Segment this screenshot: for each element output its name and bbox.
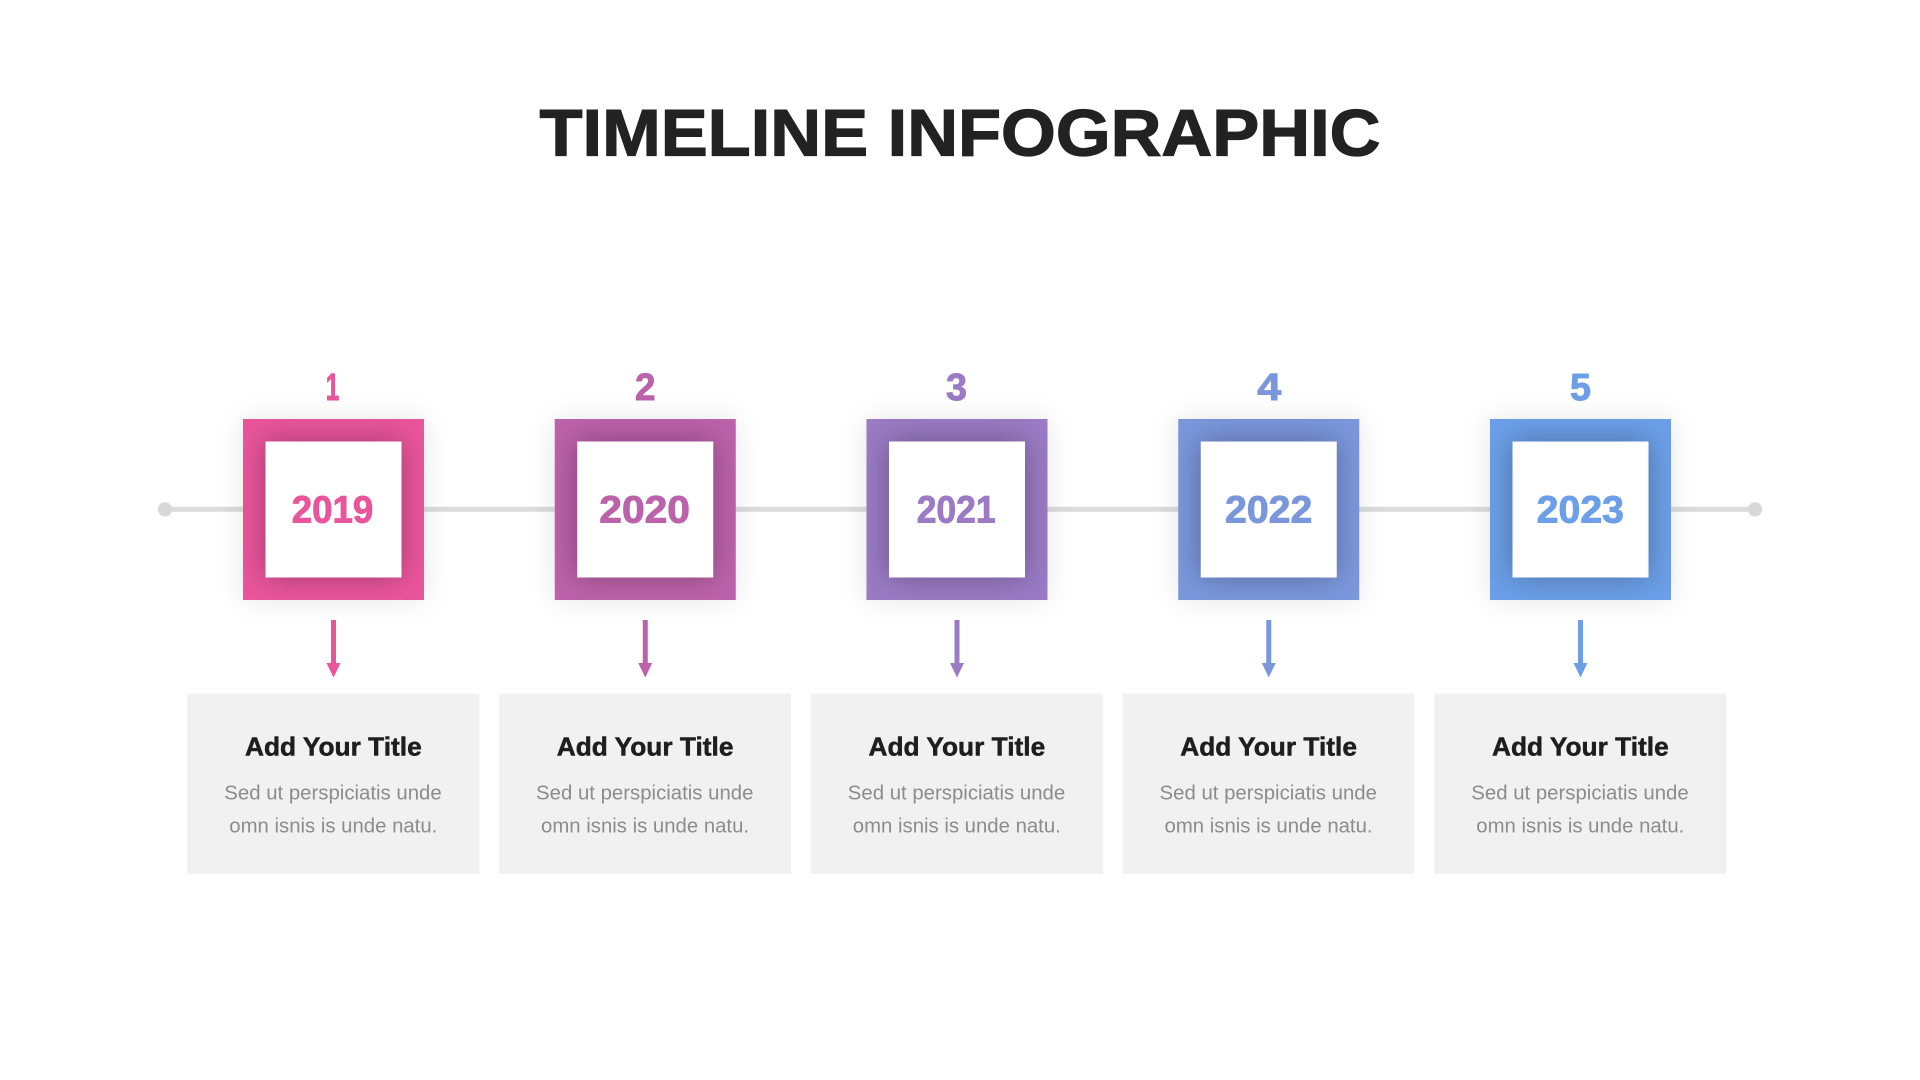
arrow 4 [1262,620,1276,678]
step 2: 2020 [499,367,791,874]
timeline end dot [1748,502,1762,516]
arrow 2 [638,620,652,678]
year box 2019 [243,419,424,600]
year box 2023 [1490,419,1671,600]
card 4: Add Your Title [1180,731,1357,761]
year box 2020: 2020 [599,490,690,532]
step 5: 2023 [1434,367,1726,874]
step 1: 2019 [187,367,479,874]
timeline start dot [158,502,172,516]
step number 2: 2 [635,367,656,409]
step number 1: 1 [326,367,339,409]
card 4: omn isnis is unde natu. [1165,816,1373,838]
step number 5: 5 [1570,367,1591,409]
card 1 [187,694,479,874]
card 5: omn isnis is unde natu. [1476,816,1684,838]
step number 4: 4 [1257,367,1281,409]
arrow 5 [1574,620,1588,678]
card 3: Sed ut perspiciatis unde [848,782,1065,804]
card 3 [811,694,1103,874]
arrow 1 [326,620,340,678]
card 5: Add Your Title [1492,731,1669,761]
card 5: Sed ut perspiciatis unde [1471,782,1689,804]
card 3: omn isnis is unde natu. [853,816,1061,838]
card 2: Add Your Title [557,731,733,761]
year box 2022: 2022 [1225,490,1312,532]
card 2: omn isnis is unde natu. [541,816,749,838]
timeline axis line [158,502,1762,516]
card 2 [499,694,791,874]
card 1: omn isnis is unde natu. [229,816,437,838]
card 5 [1434,694,1726,874]
step 4: 2022 [1123,367,1415,874]
year box 2023: 2023 [1537,490,1624,532]
year box 2019: 2019 [292,490,373,532]
card 2: Sed ut perspiciatis unde [536,782,753,804]
step 3: 2021 [811,367,1103,874]
year box 2020 [555,419,736,600]
year box 2022 [1178,419,1359,600]
card 4: Sed ut perspiciatis unde [1160,782,1377,804]
step number 3: 3 [946,367,967,409]
arrow 3 [950,620,964,678]
year box 2021: 2021 [917,490,996,532]
card 3: Add Your Title [868,731,1045,761]
year box 2021 [866,419,1048,600]
card 1: Sed ut perspiciatis unde [224,782,442,804]
card 1: Add Your Title [245,731,422,761]
card 4 [1123,694,1415,874]
title: TIMELINE INFOGRAPHIC [540,96,1380,170]
